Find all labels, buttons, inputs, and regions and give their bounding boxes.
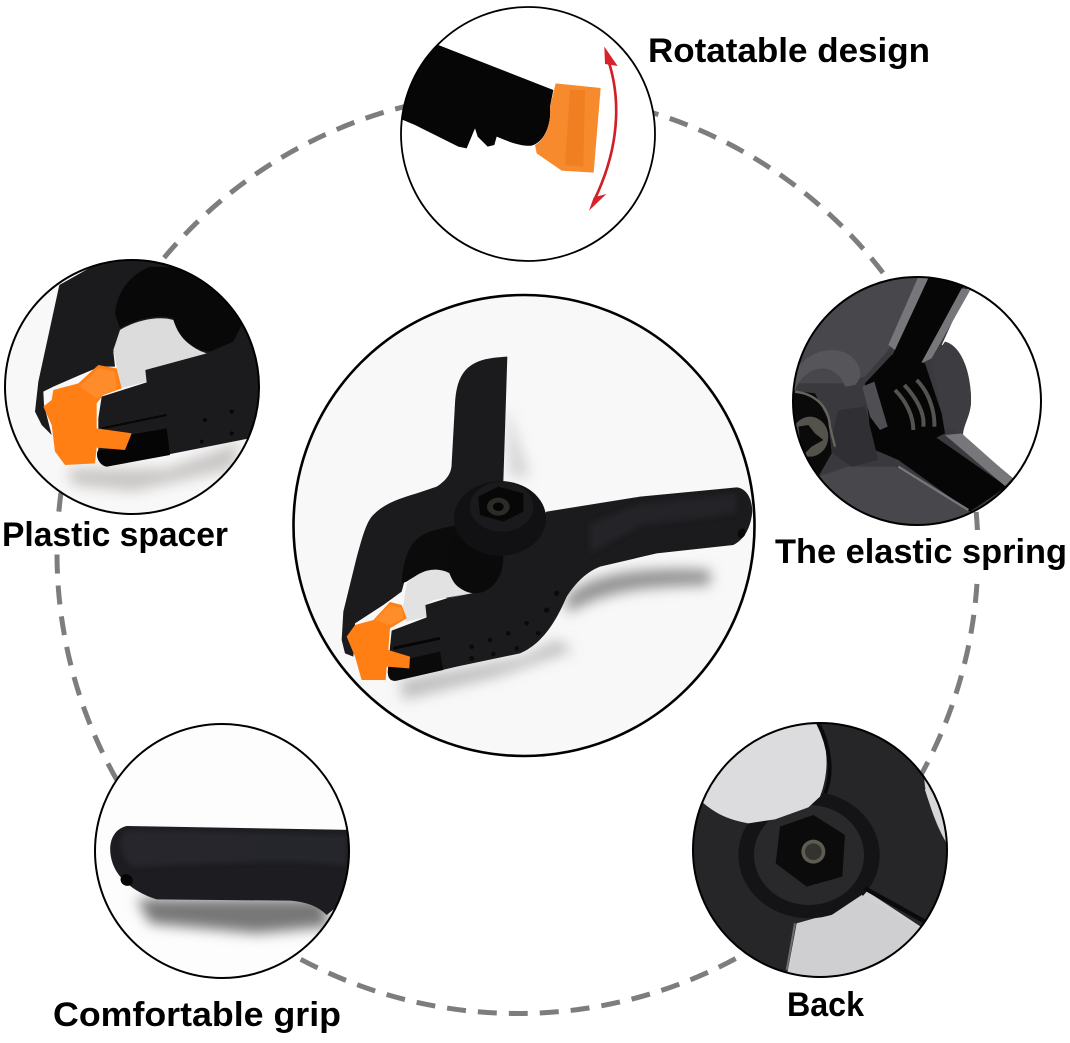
panel: back view detail [682, 720, 952, 983]
torx recess [493, 502, 504, 511]
screw head [788, 390, 832, 477]
orange rotating tip [535, 83, 601, 173]
label: plastic spacer: Plastic spacer [2, 516, 228, 554]
tip facet [565, 90, 585, 167]
label: comfortable grip: Comfortable grip [53, 996, 341, 1034]
panel: comfortable grip detail [95, 724, 353, 978]
lower nut [828, 407, 878, 467]
front arm upper [97, 328, 267, 467]
arm split line [393, 638, 440, 648]
lower dark section [97, 428, 170, 467]
upper black band [891, 275, 963, 363]
jaw opening shadowed inner wall [402, 525, 503, 598]
hex nut [942, 342, 971, 424]
pivot nut [454, 481, 546, 556]
label: rotatable design: Rotatable design [648, 32, 930, 70]
dark edge lines [818, 723, 830, 793]
orange spacer [43, 365, 132, 465]
plate edge [898, 467, 968, 510]
split line [102, 415, 167, 428]
upper band highlights [888, 277, 929, 350]
white background wedge [942, 288, 1040, 478]
spacer highlight [375, 605, 403, 625]
spring coils [895, 380, 934, 430]
bolt [801, 840, 825, 864]
grip dimples [469, 591, 559, 661]
spring pocket [865, 355, 945, 460]
bolt centre [805, 843, 822, 860]
clamp shadows [400, 407, 710, 700]
grip shadow [137, 898, 330, 933]
dark inner jaw [115, 267, 243, 352]
torx bolt [487, 498, 510, 516]
upper plate [798, 278, 918, 384]
rear arm [35, 258, 267, 435]
grip dimples [200, 410, 234, 444]
lower black band [898, 437, 1007, 512]
panel: plastic spacer detail [5, 258, 267, 514]
label: the elastic spring: The elastic spring [775, 533, 1067, 571]
dashed ring connecting the detail circles [57, 92, 978, 1014]
hex recess [776, 815, 845, 887]
handle highlights [592, 496, 734, 548]
hole in tip [118, 872, 135, 888]
screw rim arc [794, 350, 860, 390]
label: back: Back [787, 986, 864, 1024]
panel: centre clamp [294, 295, 754, 756]
label backing: plastic spacer [0, 516, 232, 554]
jaw opening background [113, 318, 207, 388]
hole in handle tip [738, 528, 746, 538]
stud [862, 382, 888, 430]
lower band edge [945, 433, 1012, 486]
rear clamp arm with upper jaw [342, 357, 510, 657]
hex socket [478, 487, 523, 522]
top opening background [702, 725, 827, 823]
handle top sheen [121, 830, 347, 867]
hub ring [738, 792, 880, 918]
black clamp back [682, 720, 952, 977]
spacer shade [80, 368, 117, 398]
orange spacer [347, 602, 410, 680]
jaw opening background [402, 570, 475, 622]
handle [110, 826, 353, 915]
label backing: elastic spring [772, 530, 1070, 574]
screw rim [795, 392, 835, 447]
screw head [470, 482, 533, 532]
panel: rotatable design detail [395, 7, 655, 261]
red double arrow [589, 47, 618, 211]
right edge background [925, 760, 952, 848]
hub inner [754, 805, 864, 905]
spring hole [449, 556, 504, 594]
torx bolt [792, 417, 828, 457]
dark underside of jaw [388, 652, 443, 681]
panel: elastic spring detail [785, 273, 1052, 533]
shadow background [67, 442, 240, 492]
band edge [921, 288, 970, 363]
black clamp jaw [395, 45, 553, 148]
torx recess [798, 425, 823, 453]
front clamp arm with handle [388, 487, 752, 681]
lower plate [820, 466, 970, 524]
lower opening background [788, 895, 920, 983]
